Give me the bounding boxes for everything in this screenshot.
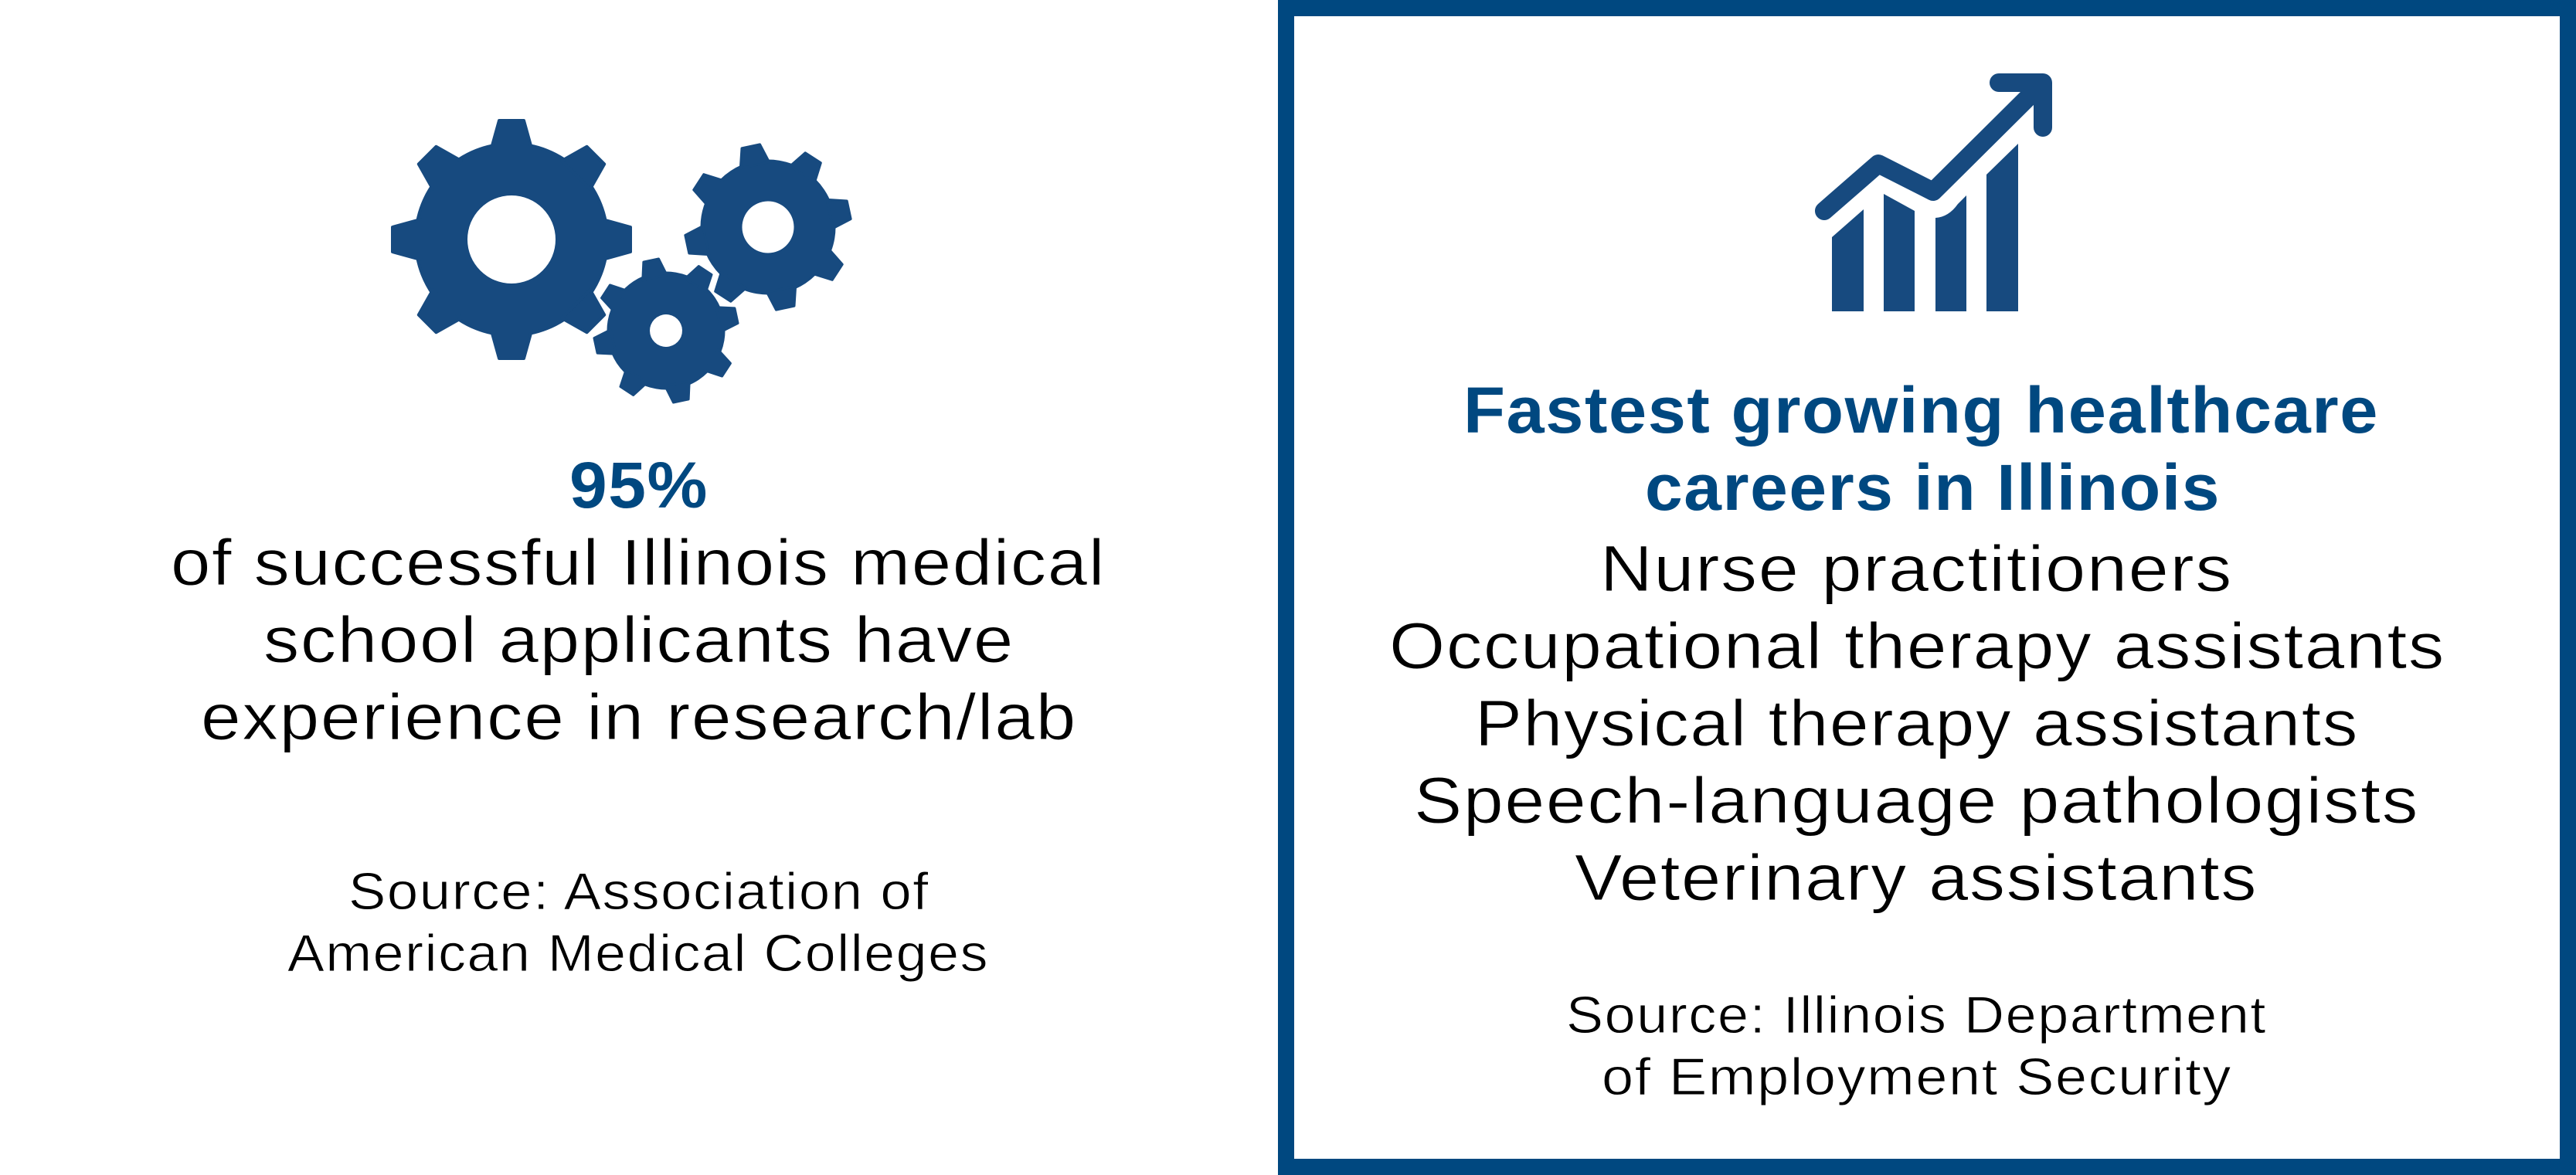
bars [1832,144,2018,311]
statistic: 95%: 95% [569,449,709,521]
source: IDES: Source: Illinois Department [1566,986,2267,1044]
panel border [1278,0,2576,1175]
small gear outline gap [581,246,751,416]
panel: fastest growing careers [1278,0,2576,1175]
list: careers: Physical therapy assistants [1475,687,2359,759]
text: statistic description [171,526,1106,753]
source: AAMC: Source: Association of [348,862,929,921]
icon: gears [393,121,866,416]
large gear [393,121,630,358]
icon: rising bar chart with arrow [1824,83,2043,311]
panel: medical school applicants [171,121,1106,983]
heading: fastest growing careers: careers in Illinois [1645,451,2221,524]
source: IDES: of Employment Security [1602,1048,2232,1106]
text: statistic description: school applicants have [263,603,1014,676]
medium gear [670,129,866,325]
list: careers: Speech-language pathologists [1414,764,2419,837]
source: IDES [1566,986,2267,1106]
small gear [581,246,751,416]
list: careers: Occupational therapy assistants [1389,610,2445,682]
source: AAMC [287,862,989,983]
list: careers [1389,532,2445,914]
trend arrow [1824,83,2043,211]
text: statistic description: of successful Illinois medical [171,526,1106,599]
source: AAMC: American Medical Colleges [287,924,989,983]
list: careers: Veterinary assistants [1575,841,2258,914]
heading: fastest growing careers [1463,374,2379,524]
list: careers: Nurse practitioners [1600,532,2233,605]
heading: fastest growing careers: Fastest growing healthcare [1463,374,2379,447]
text: statistic description: experience in research/lab [201,681,1077,753]
